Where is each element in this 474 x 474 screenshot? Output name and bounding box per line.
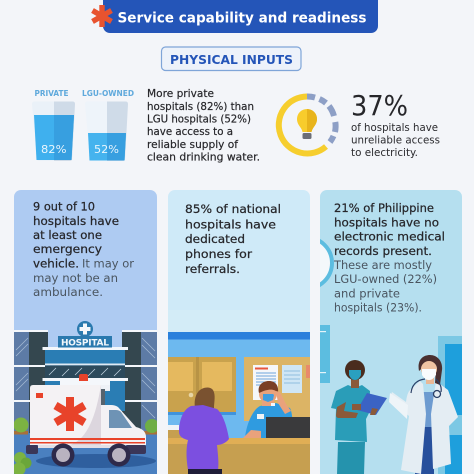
section header bbox=[92, 0, 378, 33]
water text block: More private bbox=[147, 88, 214, 100]
dedicated phones text: 85% of national bbox=[185, 203, 281, 216]
glass: LGU-owned 52%: 52% bbox=[94, 144, 119, 156]
receptionist bbox=[243, 381, 293, 438]
emergency vehicle text bbox=[33, 200, 134, 299]
panel: emergency vehicle bbox=[12, 190, 159, 474]
electricity stat: unreliable access bbox=[351, 134, 440, 146]
glass: private 82% bbox=[32, 89, 75, 161]
icon: red asterisk bbox=[92, 5, 112, 27]
nurse bbox=[331, 360, 387, 474]
dedicated phones text: hospitals have bbox=[185, 218, 276, 232]
electricity stat: of hospitals have bbox=[351, 122, 438, 134]
emergency vehicle text: vehicle. bbox=[33, 258, 79, 270]
hospital sign bbox=[58, 321, 112, 348]
panel: dedicated phones bbox=[168, 190, 310, 474]
electricity stat: 37% bbox=[351, 89, 408, 122]
electricity stat: to electricity. bbox=[351, 147, 418, 159]
water text block: have access to a bbox=[147, 126, 233, 138]
panel: electronic medical records bbox=[320, 190, 462, 474]
sub-heading: physical inputs bbox=[162, 47, 301, 70]
water text block: reliable supply of bbox=[147, 139, 238, 151]
sub-heading: physical inputs: PHYSICAL INPUTS bbox=[170, 52, 293, 67]
emergency vehicle text: hospitals have bbox=[33, 215, 119, 228]
illustration: nurse and doctor bbox=[320, 325, 462, 474]
records text: hospitals (23%). bbox=[334, 302, 422, 314]
water text block: hospitals (82%) than bbox=[147, 101, 254, 113]
records text bbox=[333, 202, 445, 314]
emergency vehicle text: It may or bbox=[82, 258, 134, 270]
glass: LGU-owned 52% bbox=[82, 89, 134, 161]
electricity stat bbox=[351, 89, 440, 159]
electricity ring chart bbox=[279, 96, 336, 153]
dedicated phones text: phones for bbox=[185, 248, 252, 261]
records text: 21% of Philippine bbox=[334, 202, 434, 215]
glass: private 82%: PRIVATE bbox=[34, 89, 68, 98]
ambulance bbox=[26, 374, 146, 466]
emergency vehicle text: at least one bbox=[33, 229, 102, 242]
glass: LGU-owned 52%: LGU-OWNED bbox=[82, 89, 134, 98]
records text: hospitals have no bbox=[334, 216, 439, 230]
records text: and private bbox=[334, 288, 400, 300]
icon: light bulb bbox=[297, 109, 317, 139]
dedicated phones text: dedicated bbox=[185, 233, 245, 246]
visitor bbox=[179, 388, 229, 474]
records text: LGU-owned (22%) bbox=[334, 273, 437, 286]
illustration: reception desk bbox=[168, 332, 310, 474]
water text block: clean drinking water. bbox=[147, 152, 260, 164]
emergency vehicle text: 9 out of 10 bbox=[33, 200, 95, 214]
doctor bbox=[389, 355, 458, 474]
emergency vehicle text: may not be an bbox=[33, 272, 118, 285]
records text: records present. bbox=[334, 245, 432, 258]
records text: These are mostly bbox=[333, 259, 432, 272]
header title: Service capability and readiness bbox=[118, 10, 366, 26]
water glasses chart bbox=[32, 89, 134, 161]
water text block: LGU hospitals (52%) bbox=[147, 114, 251, 126]
emergency vehicle text: ambulance. bbox=[33, 286, 103, 299]
emergency vehicle text: emergency bbox=[33, 243, 102, 256]
water text block bbox=[147, 88, 260, 164]
hospital sign: HOSPITAL bbox=[61, 338, 109, 348]
glass: private 82%: 82% bbox=[41, 144, 67, 156]
illustration: hospital and ambulance bbox=[12, 321, 159, 474]
records text: electronic medical bbox=[334, 230, 445, 244]
decorative clock arc bbox=[320, 239, 334, 287]
dedicated phones text bbox=[185, 203, 281, 276]
dedicated phones text: referrals. bbox=[185, 263, 240, 276]
